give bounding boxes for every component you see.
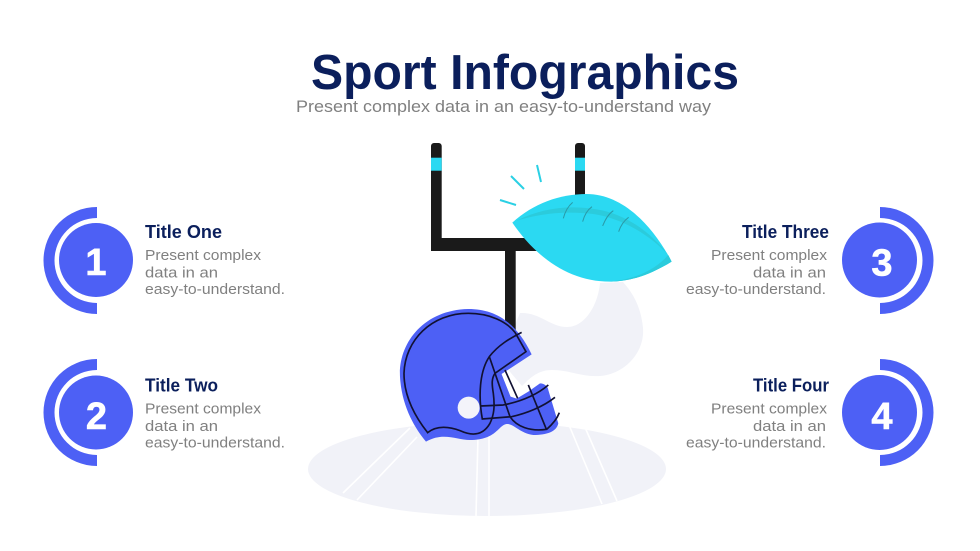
illustration: goal post — [431, 143, 585, 330]
item 2 — [43, 359, 285, 466]
text 1: Present complex — [145, 247, 262, 264]
illustration: helmet — [400, 309, 559, 442]
text 3 — [686, 222, 829, 298]
text 2: easy-to-understand. — [145, 434, 285, 452]
text 3: data in an — [753, 264, 826, 282]
text 1: data in an — [145, 264, 218, 282]
text 1: easy-to-understand. — [145, 281, 285, 298]
illustration: football — [512, 194, 672, 282]
text 4: Title Four — [753, 376, 829, 396]
text 4: Present complex — [711, 400, 828, 418]
text 1: Title One — [145, 222, 222, 242]
text 3: Title Three — [742, 222, 829, 242]
badge 4: 4 — [871, 396, 893, 438]
badge 3: 3 — [871, 242, 893, 284]
text 2 — [145, 376, 285, 452]
text 4: data in an — [753, 418, 826, 435]
badge 4 — [842, 359, 933, 466]
text 1 — [145, 222, 285, 298]
text 3: easy-to-understand. — [686, 281, 826, 298]
text 2: data in an — [145, 418, 218, 435]
title: Sport Infographics — [311, 46, 739, 100]
text 3: Present complex — [711, 247, 828, 264]
illustration: motion lines — [500, 165, 541, 205]
badge 1 — [43, 207, 133, 314]
item 3 — [686, 207, 933, 314]
badge 3 — [842, 207, 933, 314]
badge 2: 2 — [86, 396, 107, 438]
illustration: smoke trail — [500, 282, 643, 386]
subtitle: Present complex data in an easy-to-understand way — [296, 97, 712, 116]
illustration: field ellipse — [308, 422, 666, 516]
text 2: Title Two — [145, 376, 218, 396]
text 2: Present complex — [145, 400, 262, 418]
item 1 — [43, 207, 285, 314]
text 4: easy-to-understand. — [686, 434, 826, 452]
badge 2 — [43, 359, 133, 466]
text 4 — [686, 376, 829, 452]
item 4 — [686, 359, 933, 466]
badge 1: 1 — [85, 242, 107, 284]
